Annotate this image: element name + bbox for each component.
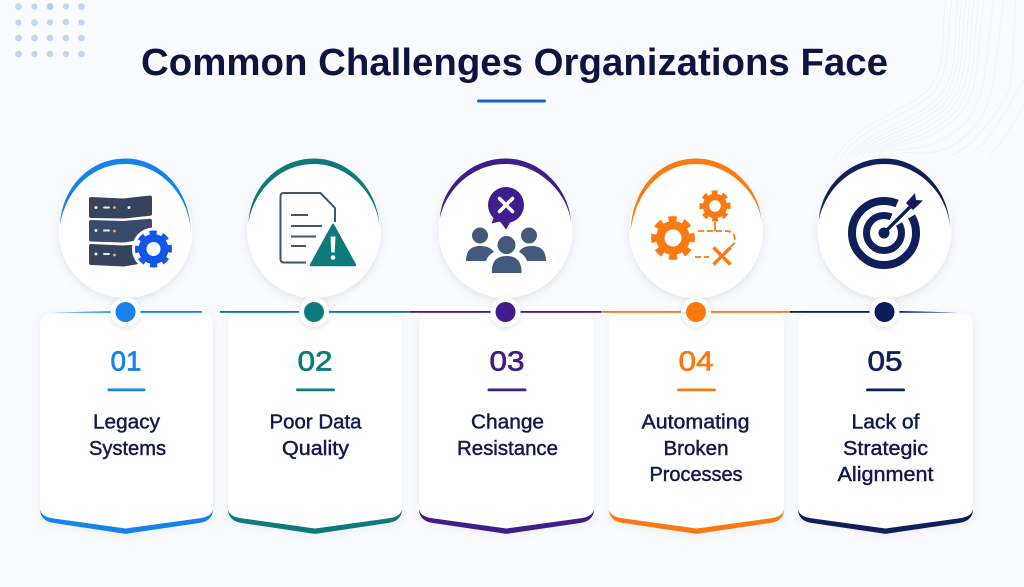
panel: card 3 Change Resistance <box>419 314 594 534</box>
icon: warning triangle <box>311 225 355 265</box>
panel: card 1 Legacy Systems <box>40 314 213 534</box>
icon: speech bubble with x <box>488 187 524 230</box>
icon badge 2: document warning <box>247 158 381 298</box>
icon: blue gear <box>132 228 175 270</box>
icon: target and arrow <box>852 188 934 265</box>
panel: card 4 Automating Broken Processes: Broken <box>664 438 728 460</box>
panel: card 1 Legacy Systems: Legacy <box>93 412 160 434</box>
icon: small gear <box>701 192 729 220</box>
icon badge 4: broken process gears <box>629 158 763 298</box>
panel: card 3 Change Resistance: Change <box>471 412 544 434</box>
panel: card 2 Poor Data Quality: 02 <box>298 346 332 376</box>
title: Common Challenges Organizations Face <box>141 42 888 84</box>
icon: server stack <box>89 196 152 266</box>
panel: card 4 Automating Broken Processes <box>609 314 784 534</box>
node 5 <box>870 297 900 327</box>
decorative dot grid <box>15 3 85 57</box>
timeline connector <box>52 311 958 313</box>
node 4 <box>681 297 711 327</box>
panel: card 5 Lack of Strategic Alignment: 05 <box>868 346 902 376</box>
icon badge 5: target <box>818 158 952 298</box>
panel: card 4 Automating Broken Processes: Processes <box>650 464 742 486</box>
panel: card 3 Change Resistance: Resistance <box>457 438 558 460</box>
icon: dashed path with x <box>695 222 735 264</box>
panel: card 3 Change Resistance: 03 <box>490 346 524 376</box>
node 1 <box>110 297 140 327</box>
icon: large gear <box>654 219 692 257</box>
icon badge 1: server with gear <box>58 158 192 298</box>
panel: card 4 Automating Broken Processes: Automating <box>642 412 750 434</box>
panel: card 2 Poor Data Quality: Poor Data <box>270 412 362 434</box>
panel: card 5 Lack of Strategic Alignment: Alignment <box>838 464 934 486</box>
panel: card 4 Automating Broken Processes: 04 <box>678 346 714 376</box>
panel: card 1 Legacy Systems: Systems <box>89 438 166 460</box>
panel: card 5 Lack of Strategic Alignment: Strategic <box>843 438 928 460</box>
panel: card 2 Poor Data Quality <box>228 314 402 534</box>
panel: card 1 Legacy Systems: 01 <box>110 346 142 376</box>
icon: document lines <box>291 215 322 246</box>
panel: card 5 Lack of Strategic Alignment <box>798 314 973 534</box>
title underline <box>477 100 546 102</box>
node 3 <box>490 297 520 327</box>
node 2 <box>299 297 329 327</box>
panel: card 5 Lack of Strategic Alignment: Lack of <box>852 412 920 434</box>
icon badge 3: team resistance <box>438 158 572 298</box>
icon: people <box>466 228 546 273</box>
panel: card 2 Poor Data Quality: Quality <box>282 438 349 460</box>
icon: document <box>280 193 335 262</box>
